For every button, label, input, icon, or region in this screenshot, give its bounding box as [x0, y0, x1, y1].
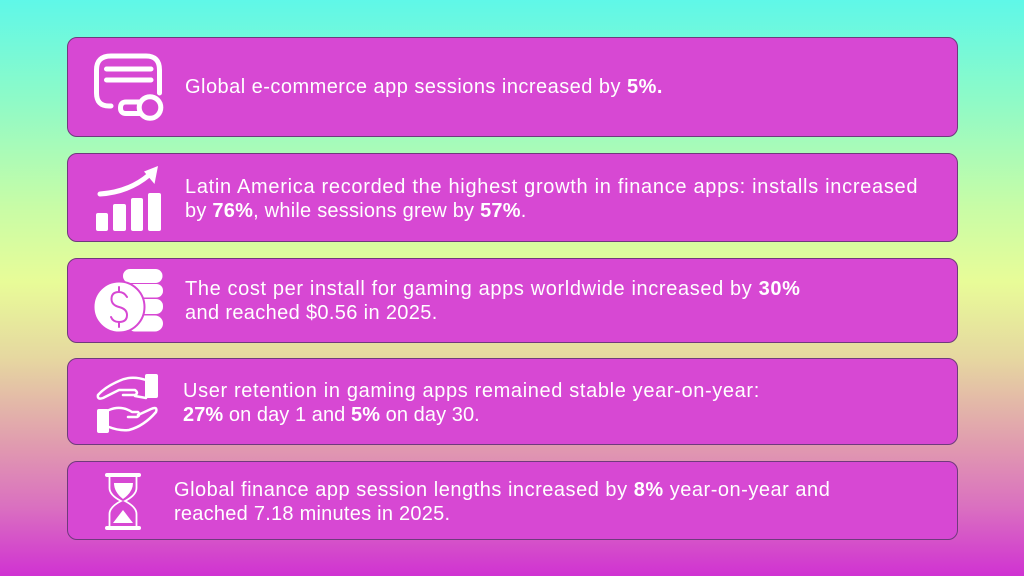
text: finance growth statement: Latin America recorded the highest growth in finance apps: installs increased	[185, 176, 918, 198]
text: retention statement: 27% on day 1 and 5% on day 30.	[183, 404, 480, 426]
text: session length statement	[174, 478, 830, 524]
text: retention statement	[183, 380, 760, 426]
icon: hourglass	[105, 473, 141, 530]
icon: dollar coin with stack	[94, 269, 163, 332]
text: cost per install statement: and reached $0.56 in 2025.	[185, 302, 438, 324]
text: cost per install statement	[185, 278, 801, 324]
text: retention statement: User retention in gaming apps remained stable year-on-year:	[183, 380, 760, 402]
text: finance growth statement: by 76%, while sessions grew by 57%.	[185, 200, 527, 222]
icon: giving and receiving hands	[96, 374, 158, 433]
text: e-commerce statement: Global e-commerce app sessions increased by 5%.	[185, 76, 663, 98]
panel: gaming cost per install	[67, 258, 958, 343]
icon: growth bars with arrow	[96, 166, 161, 231]
text: session length statement: reached 7.18 minutes in 2025.	[174, 502, 450, 524]
icon: message card with key	[94, 54, 164, 121]
panel: gaming retention	[67, 358, 958, 445]
panel: e-commerce sessions	[67, 37, 958, 137]
panel: finance session length	[67, 461, 958, 540]
panel: finance apps in Latin America	[67, 153, 958, 242]
text: session length statement: Global finance app session lengths increased by 8% year-on-year and	[174, 478, 830, 500]
text: cost per install statement: The cost per install for gaming apps worldwide increased by 30%	[185, 278, 801, 300]
text: finance growth statement	[185, 176, 918, 222]
